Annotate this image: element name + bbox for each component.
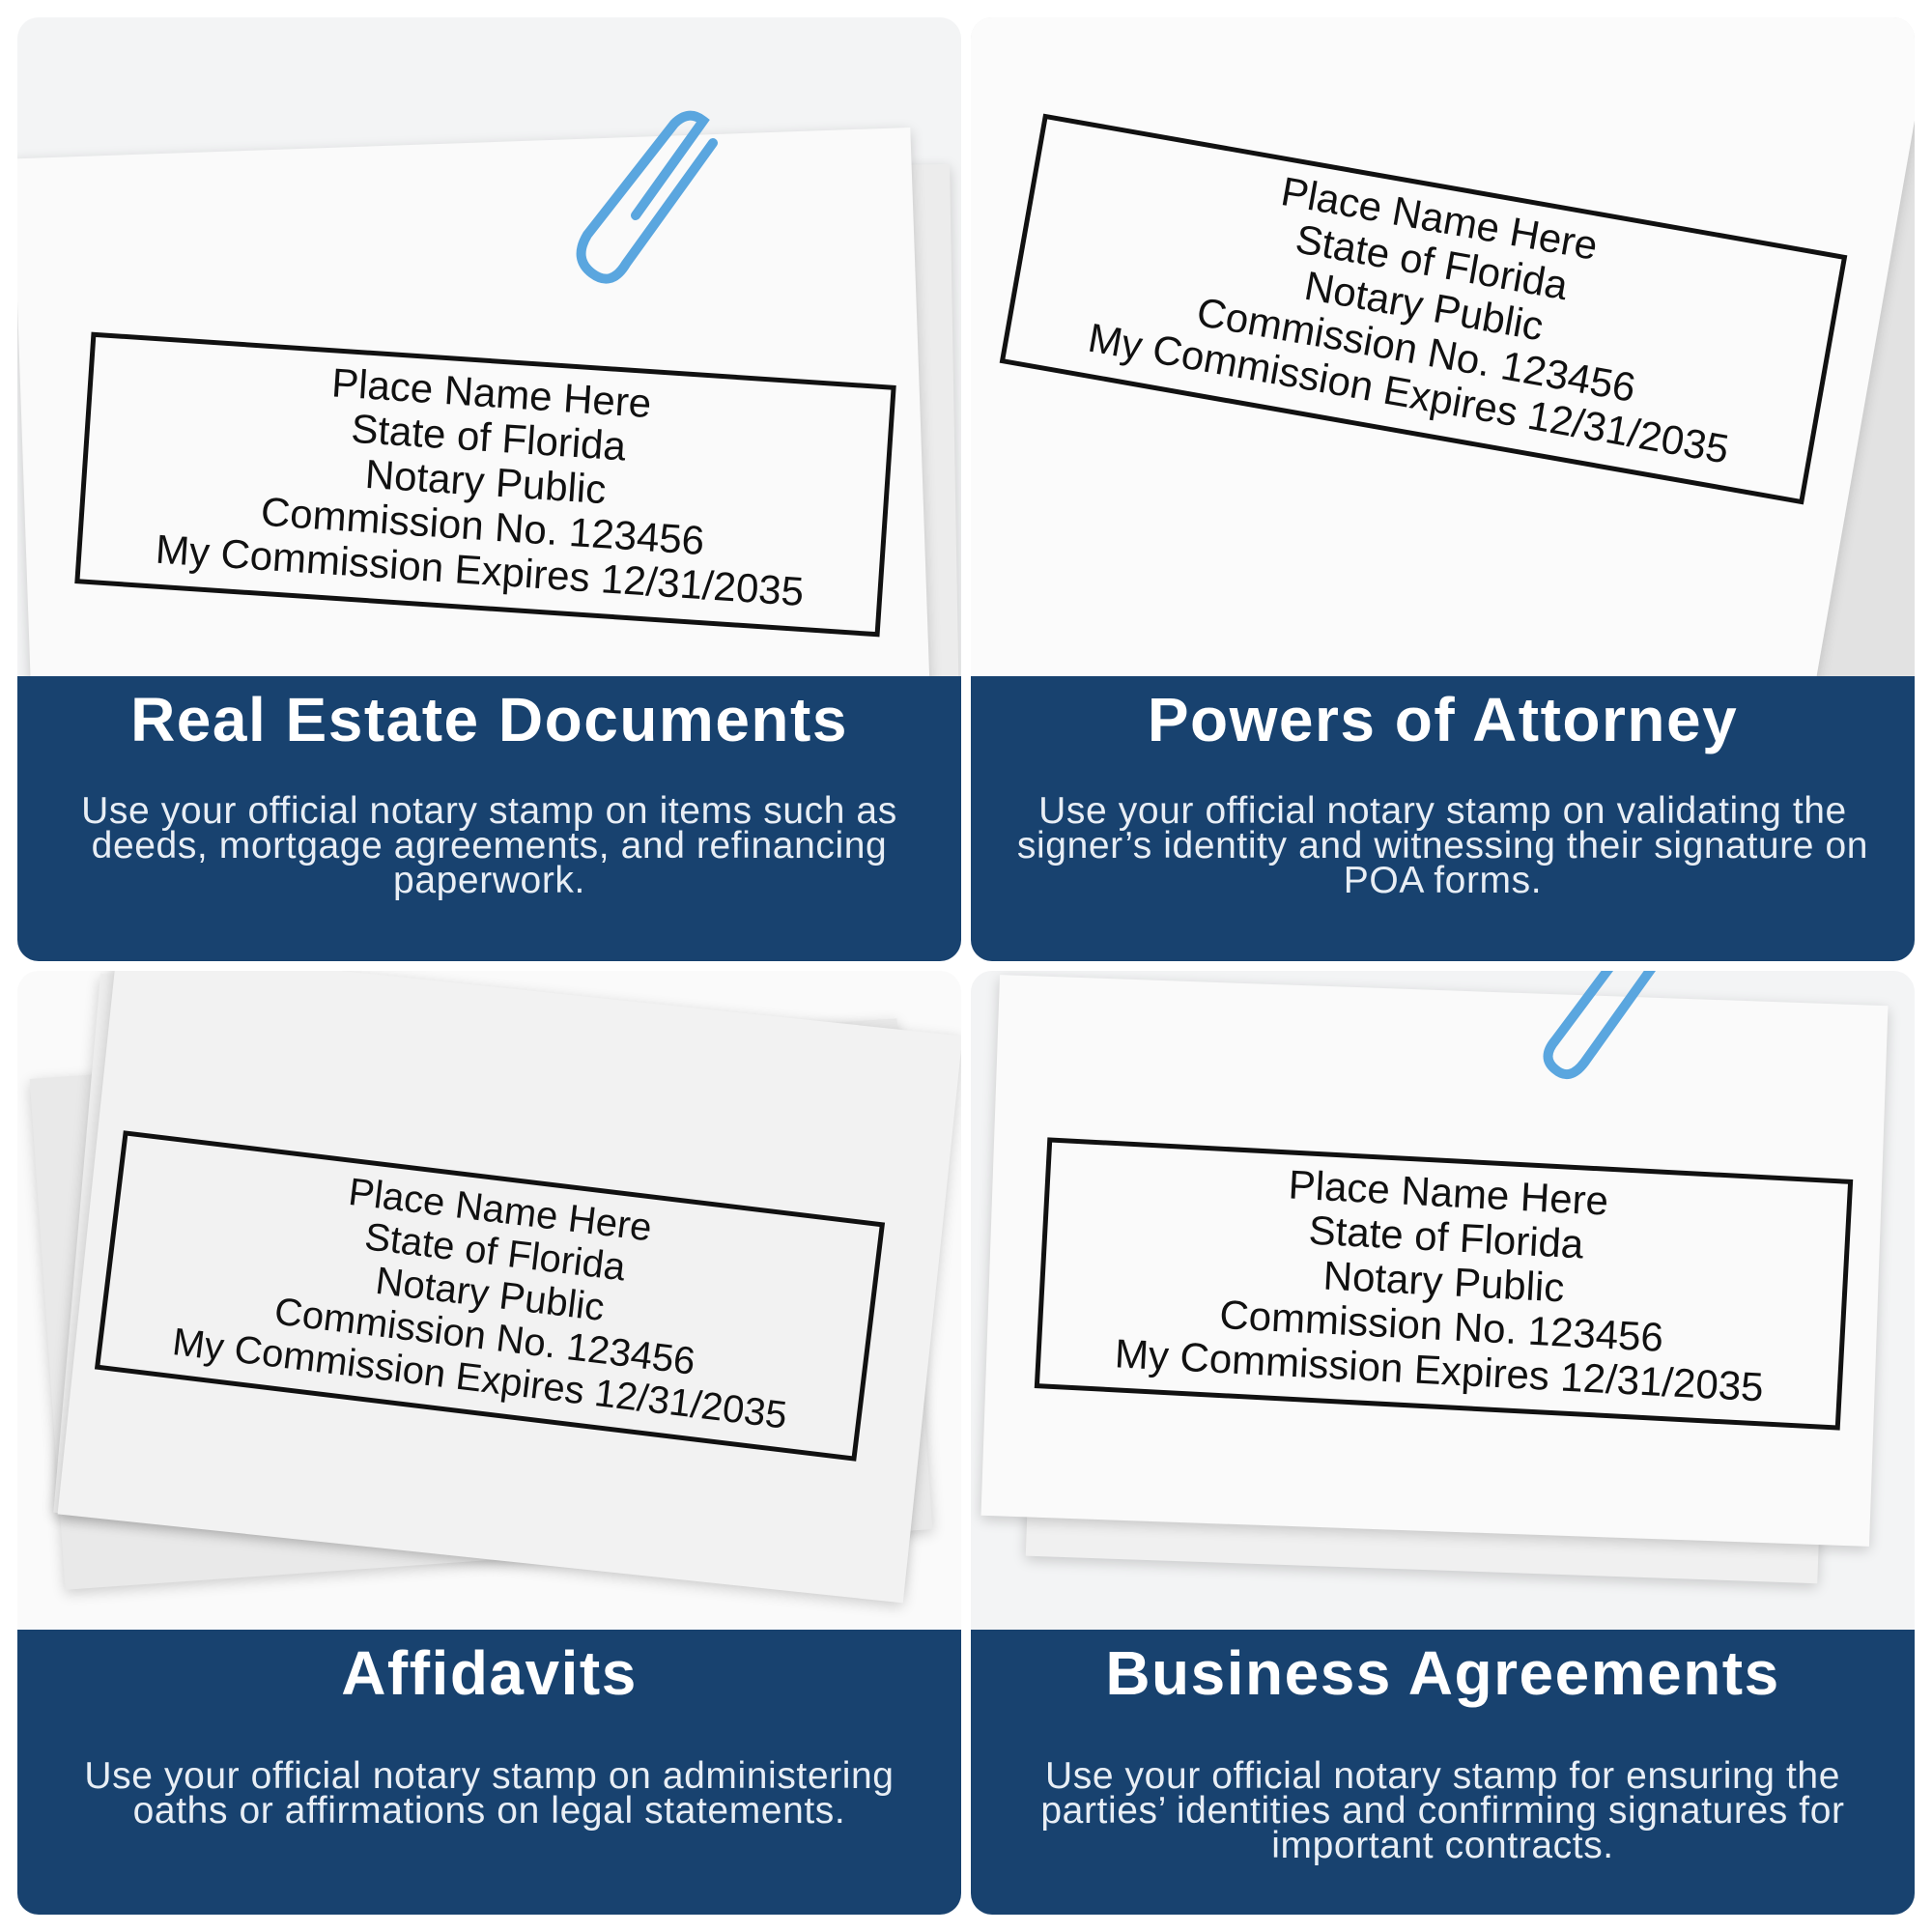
stamp impression: Place Name Here — [330, 359, 653, 426]
stamp impression — [1035, 1137, 1853, 1431]
panel: business agreements — [971, 971, 1915, 1915]
caption block: POA forms. — [1344, 860, 1542, 901]
stamp impression — [95, 1130, 885, 1462]
stamp impression: My Commission Expires 12/31/2035 — [1085, 315, 1732, 472]
stamp impression: Place Name Here — [1288, 1161, 1609, 1224]
stamp impression: Notary Public — [1322, 1252, 1566, 1311]
stamp impression: Notary Public — [364, 451, 608, 512]
stamp impression: Place Name Here — [1278, 168, 1601, 269]
stamp impression: State of Florida — [1308, 1208, 1584, 1266]
caption block — [17, 676, 961, 961]
stamp impression — [74, 332, 896, 637]
caption block — [971, 1630, 1915, 1915]
caption block: Use your official notary stamp for ensuring the — [1045, 1755, 1840, 1797]
stamp impression: Commission No. 123456 — [1194, 289, 1639, 411]
stamp impression: My Commission Expires 12/31/2035 — [155, 526, 806, 614]
icon: paperclip — [1544, 971, 1656, 1080]
caption block: Real Estate Documents — [130, 685, 848, 754]
stamp impression: Place Name Here — [346, 1171, 654, 1249]
stamp impression — [1000, 114, 1847, 504]
stamp impression: Notary Public — [373, 1260, 607, 1329]
caption block — [17, 1630, 961, 1915]
photo: textured card stack with stamp — [25, 971, 961, 1611]
caption block: Affidavits — [341, 1638, 638, 1708]
caption block: important contracts. — [1271, 1825, 1614, 1866]
caption block: Powers of Attorney — [1148, 685, 1738, 754]
stamp impression: State of Florida — [350, 406, 627, 469]
panel: affidavits — [17, 971, 961, 1915]
photo: paper with stamp — [971, 17, 1915, 676]
photo: papers with stamp — [17, 110, 961, 676]
caption block: Use your official notary stamp on validating the — [1038, 790, 1847, 832]
stamp impression: State of Florida — [1293, 215, 1571, 308]
panel: real estate documents — [17, 17, 961, 961]
caption block: parties’ identities and confirming signatures for — [1040, 1790, 1845, 1832]
stamp impression: My Commission Expires 12/31/2035 — [1114, 1330, 1765, 1409]
photo: papers with stamp and clip — [976, 971, 1893, 1592]
stamp impression: My Commission Expires 12/31/2035 — [170, 1321, 789, 1437]
stamp impression: Commission No. 123456 — [272, 1291, 697, 1383]
caption block: signer’s identity and witnessing their signature on — [1017, 825, 1868, 867]
caption block: oaths or affirmations on legal statements. — [133, 1790, 845, 1832]
stamp impression: Notary Public — [1301, 263, 1547, 349]
icon: paperclip — [576, 110, 718, 284]
panel: powers of attorney — [971, 17, 1915, 961]
stamp impression: State of Florida — [362, 1215, 628, 1289]
caption block — [971, 676, 1915, 961]
caption block: Business Agreements — [1105, 1638, 1780, 1708]
caption block: Use your official notary stamp on items such as — [81, 790, 897, 832]
stamp impression: Commission No. 123456 — [1218, 1292, 1664, 1360]
caption block: deeds, mortgage agreements, and refinancing — [92, 825, 887, 867]
caption block: paperwork. — [393, 860, 585, 901]
caption block: Use your official notary stamp on administering — [84, 1755, 895, 1797]
stamp impression: Commission No. 123456 — [260, 489, 706, 563]
